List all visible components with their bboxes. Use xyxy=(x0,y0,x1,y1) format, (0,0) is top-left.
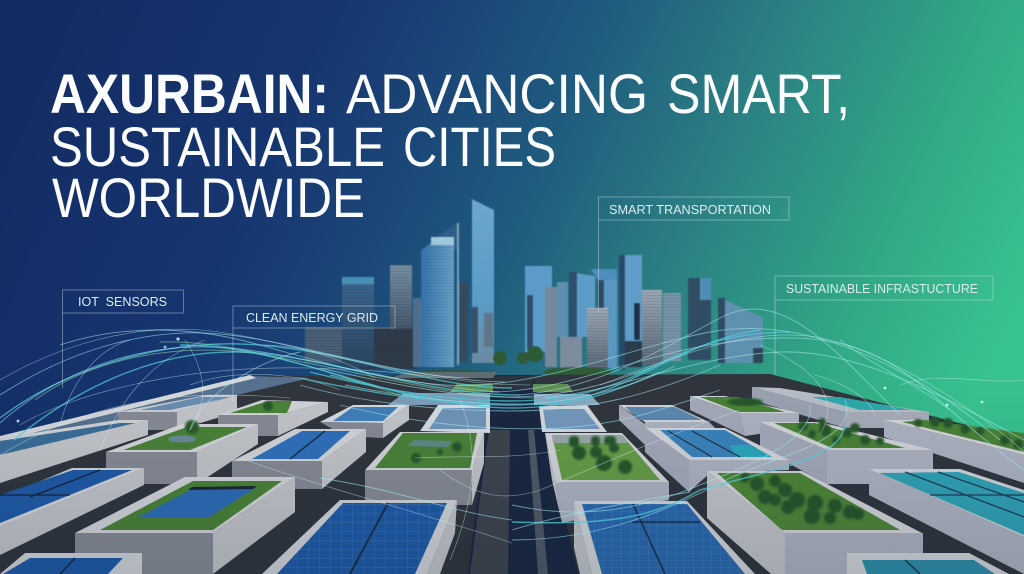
tower B xyxy=(421,237,454,367)
title: ADVANCING xyxy=(346,62,648,125)
building B12: solar roof xyxy=(420,405,490,433)
building C xyxy=(342,277,374,367)
callout: clean energy grid xyxy=(233,306,395,402)
building B1: green roof with solar insert xyxy=(75,477,295,574)
far centre roofs xyxy=(388,372,600,405)
building R12: far right solar roof xyxy=(752,387,929,428)
callout: clean energy grid: CLEAN ENERGY GRID xyxy=(246,311,378,325)
building B5: green roof xyxy=(106,420,258,484)
low block left xyxy=(305,327,417,369)
flowing data lines xyxy=(0,309,1024,560)
building R6: right teal solar roof xyxy=(869,469,1024,574)
dim overlay over development xyxy=(0,380,1024,574)
building B11: solar roof xyxy=(320,405,409,438)
building B10: green roof xyxy=(218,400,328,436)
title: AXURBAIN: xyxy=(50,62,329,125)
city skyline xyxy=(305,199,763,378)
building R7: far right green roof xyxy=(884,417,1024,483)
title: CITIES xyxy=(403,115,556,178)
building B3: left solar roof xyxy=(0,468,144,555)
title: SUSTAINABLE xyxy=(50,115,385,178)
building R2: green roof with trees xyxy=(545,433,669,523)
slim tower xyxy=(413,298,423,367)
building B6: solar roof xyxy=(232,429,366,489)
building B2: bottom centre solar roof xyxy=(262,500,457,574)
central road xyxy=(468,375,578,574)
long roof band left xyxy=(0,375,310,441)
building R5: green roof xyxy=(760,418,933,484)
building R8: bottom right solar roof xyxy=(847,553,1009,574)
ground plane xyxy=(0,374,1024,574)
building B7: green roof xyxy=(365,432,484,505)
callout: smart transportation xyxy=(598,197,789,312)
tall tower A xyxy=(472,199,494,363)
building R10: solar roof xyxy=(619,405,715,445)
building R9: green roof xyxy=(690,396,799,436)
callout: IoT sensors: IOT SENSORS xyxy=(78,295,167,309)
building B8: bottom left solar roof xyxy=(0,553,142,574)
trees at base xyxy=(410,346,612,378)
building B4: top left glass roof xyxy=(0,420,148,483)
building D xyxy=(390,265,412,329)
building R4: large green roof xyxy=(707,471,923,574)
thin spire xyxy=(437,223,459,365)
title xyxy=(50,62,850,229)
building B9: solar roof xyxy=(118,395,237,430)
callout: IoT sensors xyxy=(62,290,184,388)
callout: smart transportation: SMART TRANSPORTATION xyxy=(609,203,771,217)
building R1: bottom centre solar roof xyxy=(574,501,755,574)
callout: sustainable infrastructure xyxy=(775,276,993,375)
right towers xyxy=(525,255,763,370)
building R11: centre solar roof xyxy=(539,405,607,432)
small dark tower xyxy=(459,282,468,362)
building R3: solar roof xyxy=(645,428,789,492)
title: SMART, xyxy=(667,62,850,125)
callout: sustainable infrastructure: SUSTAINABLE INFRASTUCTURE xyxy=(786,282,978,296)
title: WORLDWIDE xyxy=(52,166,365,229)
